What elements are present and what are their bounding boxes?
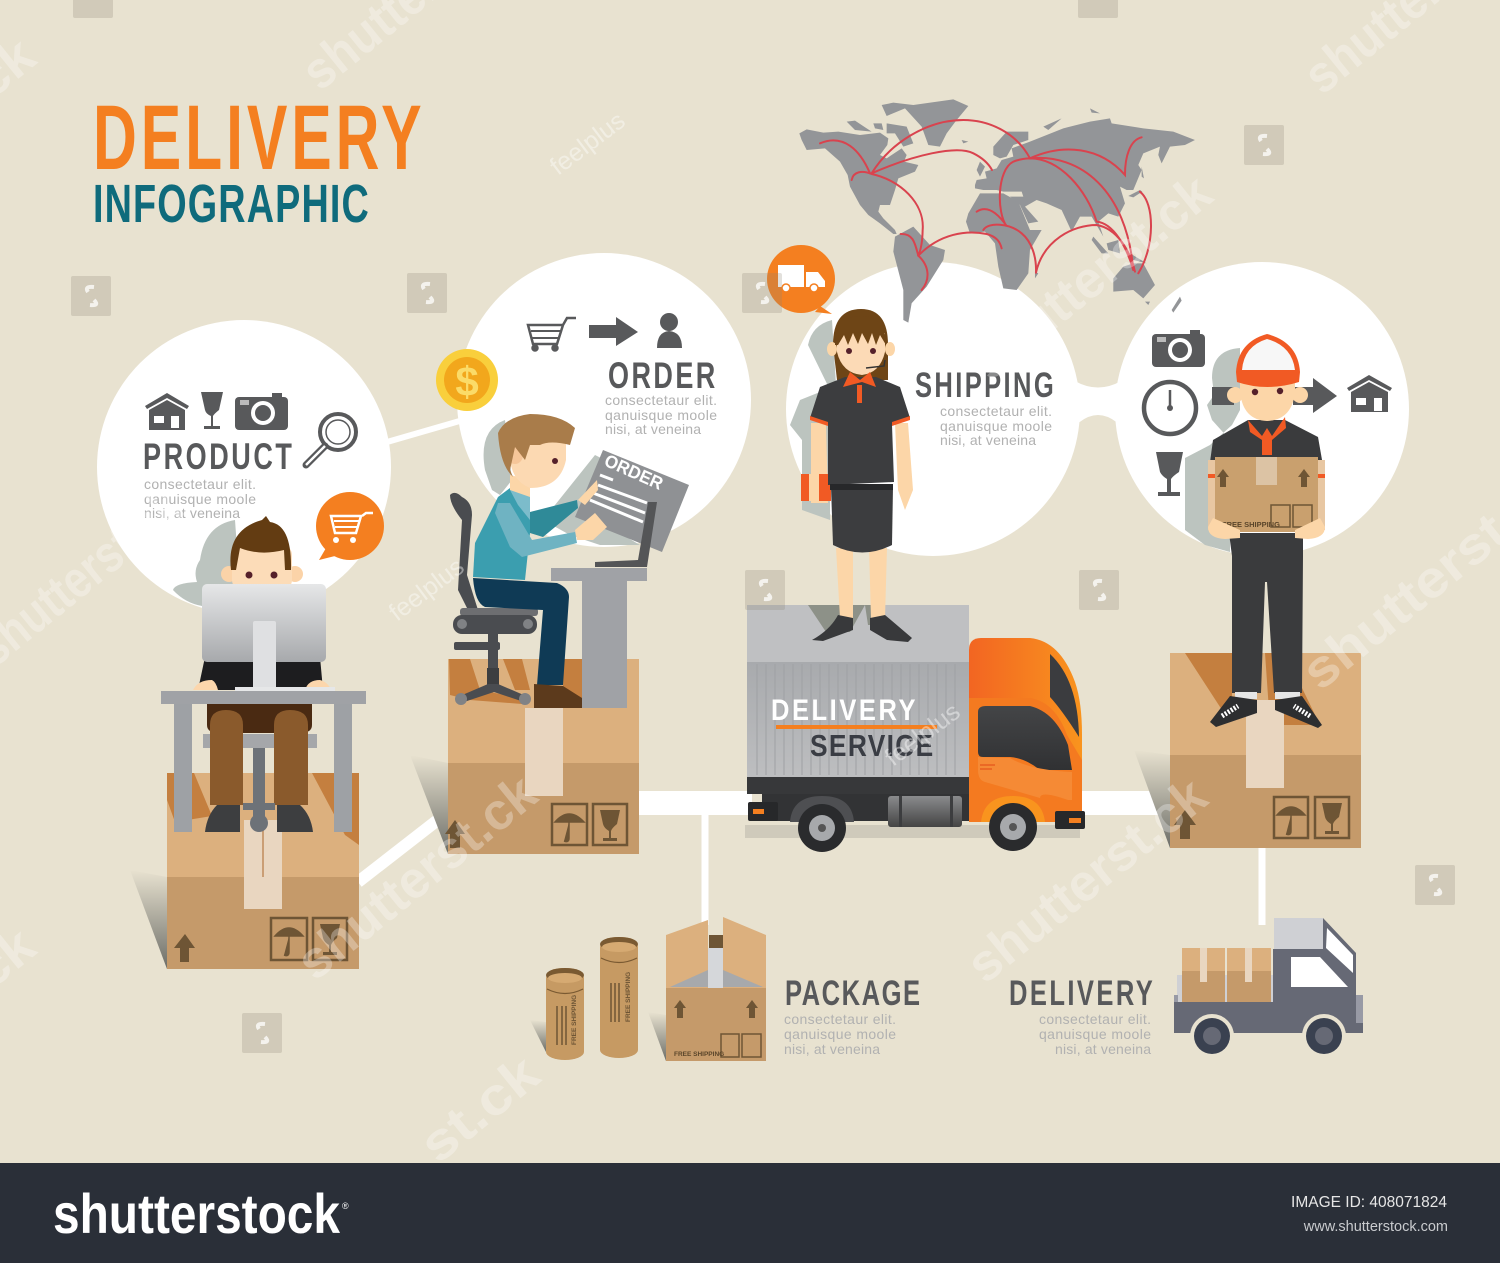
tubes: FREE SHIPPING xyxy=(571,995,578,1045)
icon: arrow xyxy=(1293,378,1337,413)
text: order body: nisi, at veneina xyxy=(605,421,701,437)
watermarks: feelplus xyxy=(384,553,469,627)
footer url: www.shutterstock.com xyxy=(1303,1219,1448,1235)
title xyxy=(93,85,422,234)
text: package body xyxy=(784,1011,896,1057)
truck: SERVICE xyxy=(810,729,933,764)
shadow xyxy=(484,420,640,545)
truck xyxy=(745,605,1085,852)
icon: house xyxy=(1347,375,1392,412)
head xyxy=(510,475,530,497)
footer bar xyxy=(0,1163,1500,1263)
heading: product: PRODUCT xyxy=(143,436,292,477)
hands xyxy=(1208,518,1325,539)
truck text: DELIVERY xyxy=(771,693,916,726)
title: INFOGRAPHIC xyxy=(93,173,369,234)
text: order body xyxy=(605,392,717,437)
rear wheel xyxy=(790,796,854,852)
icon: coin: $ xyxy=(455,358,479,405)
box 1 xyxy=(130,773,359,969)
delivery group xyxy=(1009,918,1363,1058)
text: shipping body: consectetaur elit. xyxy=(940,403,1052,419)
icon: arrow xyxy=(589,317,638,346)
fuel tank xyxy=(888,796,962,827)
trousers xyxy=(1229,533,1303,693)
collar xyxy=(1248,417,1286,455)
arms xyxy=(811,423,828,503)
heading: order: ORDER xyxy=(608,355,715,396)
tubes: FREE SHIPPING xyxy=(625,972,632,1022)
box 3 xyxy=(1134,653,1361,848)
shadow xyxy=(790,320,836,520)
bumpers xyxy=(748,802,778,821)
tubes xyxy=(530,937,638,1060)
icon: camera xyxy=(1152,330,1205,367)
folder xyxy=(801,474,831,501)
title: DELIVERY xyxy=(93,85,422,189)
watermarks: shutterst.ck xyxy=(956,767,1218,994)
icon: cart bubble xyxy=(316,492,384,560)
package group xyxy=(530,917,920,1061)
desk xyxy=(551,568,647,708)
small truck xyxy=(1174,918,1363,1058)
footer logo: shutterstock xyxy=(53,1182,341,1245)
text: product body xyxy=(144,476,256,521)
panel: destination xyxy=(1144,330,1392,496)
order paper: ORDER xyxy=(601,450,666,494)
world map xyxy=(799,99,1195,323)
text: shipping body xyxy=(940,403,1052,448)
torso xyxy=(810,377,910,485)
delivery man xyxy=(1185,334,1325,728)
person at computer xyxy=(161,516,366,832)
heading: package: PACKAGE xyxy=(785,974,920,1013)
torso xyxy=(1208,420,1325,477)
text: product body: qanuisque moole xyxy=(144,491,256,507)
text: shipping body: nisi, at veneina xyxy=(940,432,1036,448)
watermarks: shutterst.ck xyxy=(961,164,1223,391)
icon: house xyxy=(145,393,189,430)
connector lines xyxy=(358,418,1262,925)
shadow xyxy=(1185,348,1240,552)
text: order body: consectetaur elit. xyxy=(605,392,717,408)
front arm xyxy=(495,503,577,557)
heading: shipping: SHIPPING xyxy=(915,366,1054,405)
open box: FREE SHIPPING xyxy=(674,1051,724,1058)
back arm xyxy=(530,500,578,537)
torso xyxy=(473,488,530,580)
woman xyxy=(790,309,913,642)
held box xyxy=(1215,457,1318,532)
panel circles xyxy=(97,253,1409,614)
text: package body: nisi, at veneina xyxy=(784,1041,880,1057)
shoes xyxy=(812,615,912,642)
laptop xyxy=(595,502,657,567)
text: shipping body: qanuisque moole xyxy=(940,418,1052,434)
ears xyxy=(827,342,837,356)
box 2 xyxy=(410,659,639,854)
watermarks: shutterst.ck xyxy=(286,764,548,991)
legs xyxy=(836,548,887,618)
panel: product xyxy=(143,392,384,560)
text: delivery body xyxy=(1039,1011,1151,1057)
text: package body: consectetaur elit. xyxy=(784,1011,896,1027)
icon: magnifier xyxy=(306,414,356,465)
panel: shipping xyxy=(767,245,1054,448)
footer image id: IMAGE ID: 408071824 xyxy=(1291,1194,1447,1211)
text: delivery body: nisi, at veneina xyxy=(1055,1041,1151,1057)
person at laptop xyxy=(450,414,689,708)
text: order body: qanuisque moole xyxy=(605,407,717,423)
watermarks: feelplus xyxy=(545,107,630,181)
held box: FREE SHIPPING xyxy=(1222,520,1280,529)
text: product body: consectetaur elit. xyxy=(144,476,256,492)
text: delivery body: qanuisque moole xyxy=(1039,1026,1151,1042)
chair xyxy=(450,493,538,705)
text: delivery body: consectetaur elit. xyxy=(1039,1011,1151,1027)
icon: clock xyxy=(1144,382,1196,434)
heading: delivery: DELIVERY xyxy=(1009,974,1153,1013)
shadow xyxy=(745,825,1080,838)
watermarks: feelplus xyxy=(880,698,965,772)
watermarks: st.ck xyxy=(409,1044,551,1174)
icon: person xyxy=(657,313,682,348)
panel: order xyxy=(436,313,717,437)
back hair xyxy=(833,309,888,380)
face xyxy=(837,333,885,375)
text: package body: qanuisque moole xyxy=(784,1026,896,1042)
head xyxy=(1227,387,1243,403)
watermark tiles xyxy=(71,0,1455,1053)
collar xyxy=(843,372,876,387)
icon: coin xyxy=(436,349,498,411)
footer logo: ® xyxy=(342,1201,349,1211)
watermarks: shutterst xyxy=(1291,502,1500,701)
cab xyxy=(969,638,1082,822)
cap xyxy=(1236,334,1300,387)
icon: shopping cart xyxy=(528,318,576,350)
icon: wine glass xyxy=(1156,452,1183,496)
order paper xyxy=(575,450,689,552)
icon: wine glass xyxy=(201,392,223,429)
open box xyxy=(648,917,766,1061)
skirt xyxy=(831,487,893,552)
hands xyxy=(575,480,607,540)
shoes xyxy=(1210,696,1322,728)
trousers xyxy=(473,578,569,685)
front wheel xyxy=(981,796,1045,851)
cargo xyxy=(747,605,969,662)
arrow tail xyxy=(1212,387,1234,405)
text: product body: nisi, at veneina xyxy=(144,505,240,521)
icon: camera xyxy=(235,393,288,430)
icon: truck bubble xyxy=(767,245,835,314)
